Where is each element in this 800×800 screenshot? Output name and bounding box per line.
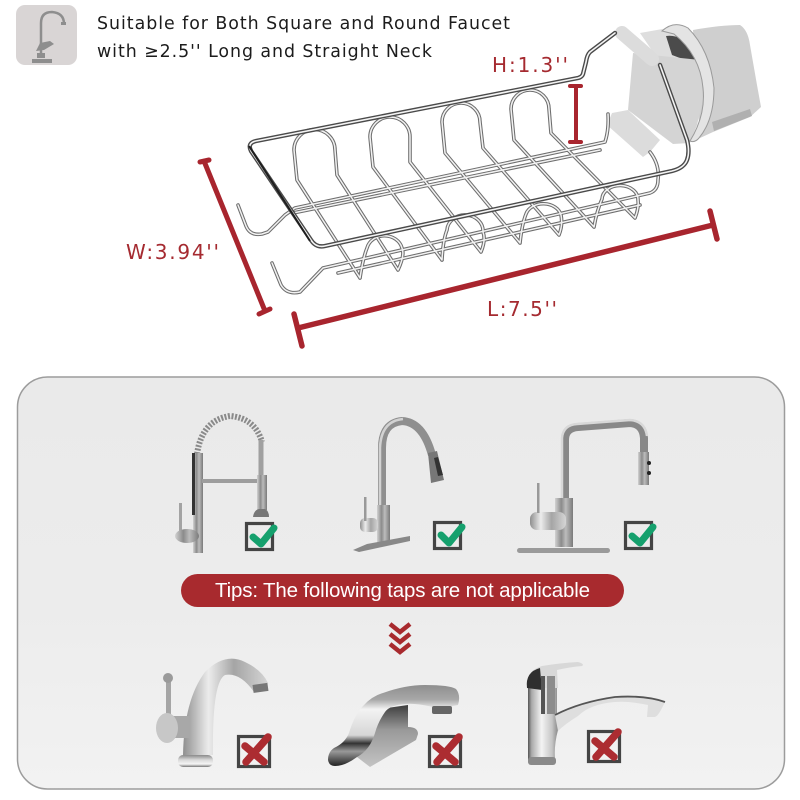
heading: compatibility note: with ≥2.5'' Long and Straight Neck xyxy=(97,42,433,62)
panel: faucet types xyxy=(18,377,784,789)
arrow: double chevron xyxy=(390,624,410,652)
faucet: square neck xyxy=(517,420,651,553)
heading: compatibility note xyxy=(97,14,510,62)
check: third xyxy=(626,522,653,548)
dimension: width: W:3.94'' xyxy=(126,240,219,264)
dimension: length xyxy=(294,211,717,346)
dimension: length: L:7.5'' xyxy=(487,297,557,321)
heading: compatibility note: Suitable for Both Square and Round Faucet xyxy=(97,14,510,34)
faucet: single lever mixer xyxy=(527,662,665,765)
cross: second xyxy=(430,736,460,766)
icon: faucet xyxy=(16,5,77,65)
clamp housing xyxy=(607,25,761,157)
dimension: height xyxy=(492,53,581,142)
faucet: spring neck xyxy=(175,416,269,553)
tips banner: Tips: The following taps are not applicable xyxy=(215,579,590,602)
wire basket xyxy=(238,33,688,293)
dimension: width xyxy=(126,160,270,314)
dimension: height: H:1.3'' xyxy=(492,53,568,77)
faucet: arched pull-down xyxy=(353,419,444,552)
cross: first xyxy=(238,736,270,766)
check: first xyxy=(246,524,274,550)
tips banner xyxy=(181,574,624,607)
rack with clamp xyxy=(238,25,761,293)
faucet: low deck mount xyxy=(328,685,459,767)
check: second xyxy=(434,522,462,548)
cross: third xyxy=(588,732,620,762)
faucet: short arched basin xyxy=(156,659,268,767)
